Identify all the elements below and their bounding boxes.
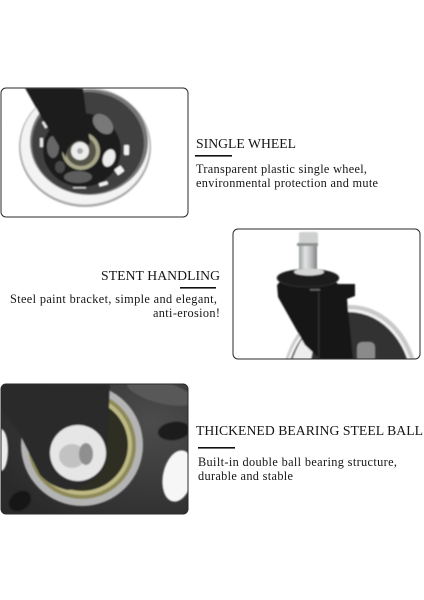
- panel: bearing close-up photo: [0, 384, 188, 514]
- icon: transparent wheel tyre: [19, 87, 151, 207]
- heading: stent handling: STENT HANDLING: [101, 268, 220, 283]
- icon: wheel openings: [2, 384, 188, 512]
- heading rule: [180, 287, 216, 289]
- text block: bearing description: Built-in double ball bearing structure,: [198, 455, 397, 469]
- icon: bearing rings: [21, 384, 143, 506]
- text block: single wheel description: Transparent plastic single wheel,: [196, 162, 367, 176]
- icon: steel stem: [297, 232, 318, 272]
- text block: bearing description: durable and stable: [198, 469, 294, 483]
- heading: thickened bearing steel ball: THICKENED BEARING STEEL BALL: [196, 423, 423, 438]
- icon: bracket arm over bearing: [20, 384, 110, 491]
- infographic canvas: [0, 88, 422, 514]
- icon: caster bracket: [277, 268, 355, 359]
- text block: single wheel description: environmental protection and mute: [196, 176, 379, 190]
- icon: caster bracket arm: [25, 88, 90, 158]
- icon: axle end: [50, 425, 106, 481]
- icon: wheel hub with spokes: [40, 110, 129, 188]
- heading: single wheel: SINGLE WHEEL: [196, 136, 296, 151]
- icon: bearing: [62, 132, 100, 170]
- heading rule: [195, 155, 232, 157]
- heading rule: [198, 447, 235, 449]
- text block: stent handling description: Steel paint bracket, simple and elegant,: [10, 292, 217, 306]
- icon: wheel behind bracket: [285, 304, 415, 358]
- icon: axle cap: [71, 142, 89, 160]
- panel: stent handling photo: [232, 228, 420, 360]
- panel: single wheel photo: [1, 87, 188, 217]
- text block: stent handling description: anti-erosion!: [153, 306, 220, 320]
